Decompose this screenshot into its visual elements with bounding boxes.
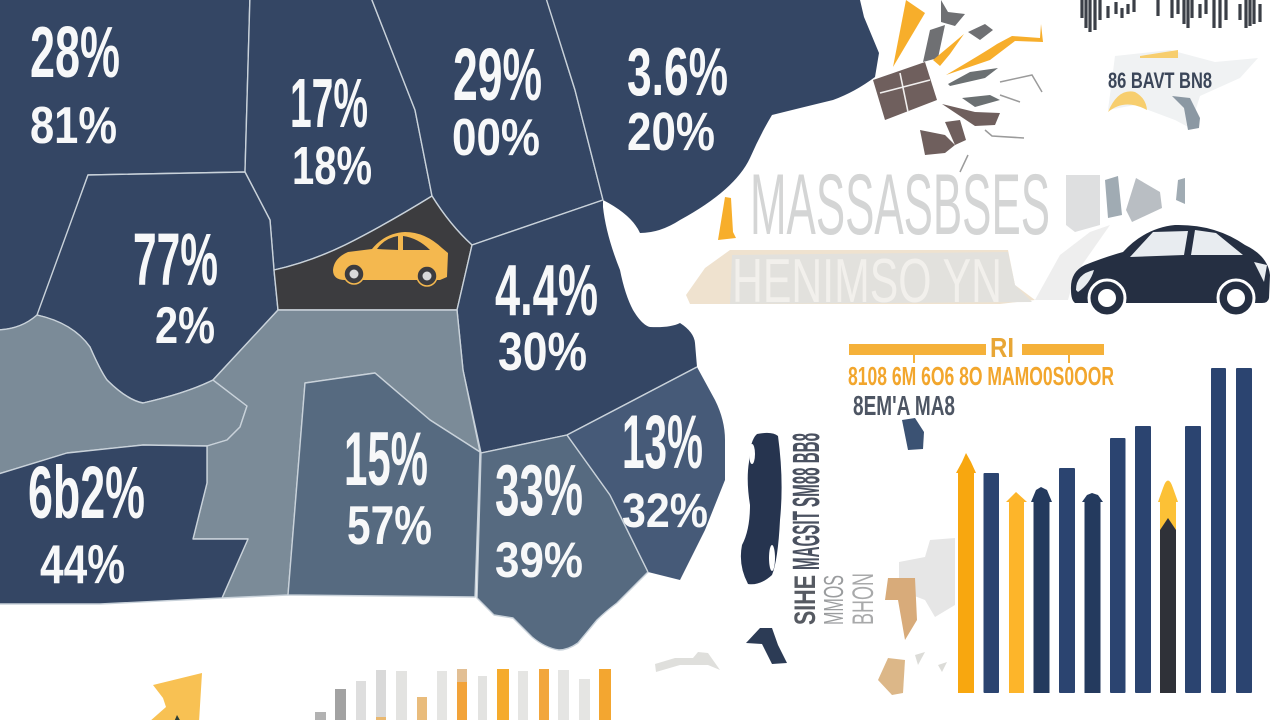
region: 13% (567, 367, 725, 580)
faded map fragments (878, 538, 955, 695)
icon: barcode-like header text (1082, 0, 1260, 32)
icon: dark car (1071, 225, 1270, 316)
region: 29% (370, 0, 603, 245)
label: 18%: 18% (292, 136, 372, 196)
label: 57%: 57% (347, 494, 432, 556)
label: 81%: 81% (30, 97, 117, 155)
infographic canvas: MAGSIT SM88 BB8 (786, 433, 828, 570)
label: 32%: 32% (622, 485, 708, 538)
icon: vertical car (741, 433, 782, 584)
icon: burst of shards (873, 0, 1043, 172)
bar 10 (1185, 426, 1201, 693)
region: car (274, 196, 472, 310)
bar 5 (1059, 468, 1075, 693)
small text cluster (789, 573, 880, 625)
icon: navy shard (746, 628, 787, 664)
bar 12 (1236, 368, 1252, 693)
icon: yellow arrow (149, 673, 202, 720)
label: dark caption: 8EM'A MA8 (853, 390, 955, 421)
map percentages (28, 13, 728, 595)
label: 3.6%: 3.6% (627, 34, 728, 110)
bar 4 (1031, 487, 1052, 693)
label: 15%: 15% (344, 417, 428, 502)
label: 39%: 39% (495, 532, 583, 588)
faded banner with text (686, 225, 1110, 316)
bar 1 (956, 453, 976, 693)
region: grey left (0, 315, 247, 475)
bar 7 (1110, 438, 1126, 693)
icon: grey fragment (655, 652, 720, 672)
chart legend: orange rule (848, 332, 1114, 421)
bar 2 (984, 473, 999, 693)
bar 9 (1158, 480, 1178, 693)
label: BAVT: 86 BAVT BN8 (1108, 68, 1212, 93)
label: 17%: 17% (290, 64, 368, 142)
region: 17% (245, 0, 432, 270)
icon: navy blob (902, 418, 924, 450)
icon: yellow car on map (333, 232, 448, 286)
bar 11 (1211, 368, 1226, 693)
small text cluster: SIHE (789, 575, 822, 625)
bar chart: bottom (315, 669, 611, 720)
region: 4.4% (457, 200, 697, 453)
bar 3 (1006, 492, 1027, 693)
label: 00%: 00% (452, 109, 540, 167)
label: 6b2%: 6b2% (28, 451, 145, 534)
label: banner text: HENIMSO YN (732, 247, 1002, 316)
bar 8 (1135, 426, 1151, 693)
map: regions (0, 0, 879, 650)
label: 13%: 13% (622, 400, 703, 485)
small text cluster: MMOS (818, 575, 849, 625)
label: orange caption: 8108 6M 6O6 8O MAMO0S0OOR (848, 361, 1114, 391)
label: 77%: 77% (133, 218, 218, 301)
bar chart: right (956, 368, 1252, 693)
region: 3.6% (545, 0, 879, 233)
region: top-left 28% (0, 0, 250, 330)
region: 33% (477, 435, 648, 650)
label: 29%: 29% (453, 33, 542, 116)
label: 30%: 30% (498, 322, 587, 382)
label: 2%: 2% (155, 297, 215, 355)
label: rule caption: RI (990, 332, 1014, 363)
small map label (1108, 50, 1258, 130)
region: 62% (0, 445, 248, 604)
label: 20%: 20% (627, 102, 715, 162)
bar 6 (1082, 493, 1103, 693)
label: 33%: 33% (495, 451, 583, 531)
label: 28%: 28% (30, 13, 120, 93)
region: grey centre (193, 310, 480, 598)
label: 4.4%: 4.4% (495, 251, 598, 331)
accent: orange wedge (718, 197, 736, 240)
region: 15% (288, 373, 480, 597)
label: 44%: 44% (40, 533, 125, 595)
region: 77% (37, 172, 278, 403)
small text cluster: BHON (847, 573, 880, 625)
